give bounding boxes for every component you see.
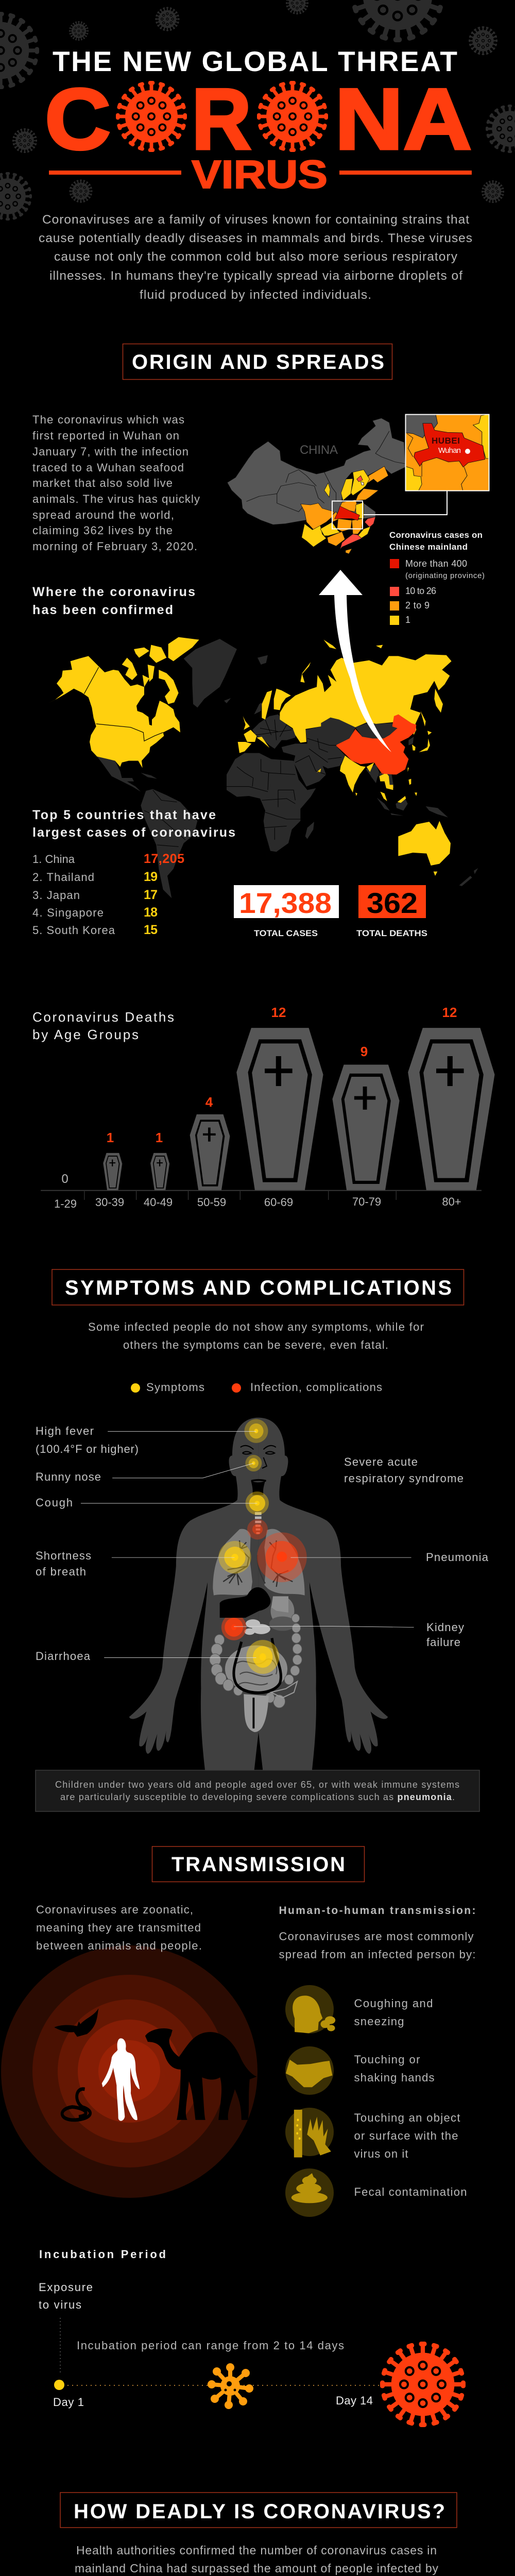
marker: pneumonia	[257, 1532, 307, 1582]
title word: CORONA	[45, 71, 472, 167]
leader lines	[81, 1431, 414, 1657]
icon: cough	[293, 1995, 335, 2033]
symptoms legend: Infection, complications	[250, 1381, 382, 1394]
china map legend: 10 to 26	[405, 586, 436, 596]
transmission route labels: virus on it	[354, 2147, 408, 2160]
stat: total deaths: 362	[367, 887, 418, 919]
coffin chart: 30-39	[95, 1196, 124, 1209]
body labels: Kidney	[426, 1621, 464, 1634]
stat: total deaths	[356, 885, 427, 938]
title word: CORONA: R	[192, 71, 251, 167]
body labels: of breath	[36, 1565, 86, 1578]
origin text: morning of February 3, 2020.	[32, 540, 197, 553]
coffin chart: 80+	[442, 1195, 461, 1208]
coffin chart: 50-59	[197, 1196, 226, 1209]
hubei inset map: Wuhan	[438, 446, 461, 455]
transmission route labels: sneezing	[354, 2015, 404, 2028]
coffin chart: 40-49	[144, 1196, 173, 1209]
transmission route labels	[354, 1997, 467, 2198]
transmission intro: meaning they are transmitted	[36, 1921, 201, 1934]
heading: deaths by age: by Age Groups	[32, 1027, 139, 1042]
transmission route labels: shaking hands	[354, 2071, 435, 2084]
incubation period timeline: to virus	[39, 2298, 81, 2311]
symptoms legend: Symptoms	[146, 1381, 204, 1394]
stat: total deaths: TOTAL DEATHS	[356, 928, 427, 938]
heading: transmission: TRANSMISSION	[171, 1853, 345, 1876]
list: top 5 countries: 3. Japan	[32, 889, 80, 902]
list: top 5 countries: 18	[144, 905, 158, 920]
stat: total cases	[234, 885, 339, 938]
coffin chart: 9	[360, 1044, 368, 1059]
transmission intro	[36, 1903, 202, 1952]
origin text: spread around the world,	[32, 509, 174, 521]
symptoms intro: Some infected people do not show any symptoms, while for	[88, 1320, 424, 1333]
coffin chart: 12	[271, 1005, 286, 1020]
coffin chart: 1	[156, 1130, 163, 1145]
hubei inset map	[405, 414, 490, 492]
heading: top 5 countries	[32, 808, 235, 840]
zoonotic rings	[1, 1945, 258, 2198]
background virus pattern	[0, 0, 515, 221]
lower markers	[221, 1419, 279, 1674]
list: top 5 countries: 15	[144, 923, 158, 937]
body labels: Cough	[36, 1496, 73, 1509]
deadly intro	[75, 2544, 439, 2576]
icon: human	[102, 2038, 140, 2121]
human-to-human text: Human-to-human transmission:	[279, 1905, 476, 1917]
abdominal organs	[210, 1597, 302, 1732]
intro text: illnesses. In humans they're typically spread via airborne droplets of	[49, 269, 462, 283]
title word: CORONA: C	[45, 71, 111, 167]
heading: how deadly	[60, 2493, 457, 2528]
icon: hand and surface	[294, 2110, 331, 2157]
stat: total cases: 17,388	[239, 887, 332, 919]
human-to-human text: spread from an infected person by:	[279, 1948, 476, 1961]
stat: total cases: TOTAL CASES	[254, 928, 318, 938]
heading: how deadly: HOW DEADLY IS CORONAVIRUS?	[74, 2500, 445, 2523]
origin text: January 7, with the infection	[32, 445, 188, 458]
callout: susceptibility note: are particularly susceptible to developing severe complications such as pneumonia.	[60, 1792, 455, 1802]
day 1 marker	[54, 2380, 64, 2390]
icon: virus as letter O	[116, 81, 328, 152]
heading: where confirmed	[32, 585, 195, 617]
list: top 5 countries: 4. Singapore	[32, 906, 104, 919]
incubation period timeline: Incubation period can range from 2 to 14 days	[77, 2339, 344, 2352]
origin text: animals. The virus has quickly	[32, 493, 200, 505]
china map legend: 2 to 9	[405, 600, 430, 611]
body labels: Diarrhoea	[36, 1650, 91, 1663]
body diagram	[81, 1418, 414, 1770]
intro text: fluid produced by infected individuals.	[140, 288, 371, 302]
body labels: respiratory syndrome	[344, 1472, 464, 1485]
markers: cough and trachea	[246, 1492, 269, 1539]
transmission route labels: or surface with the	[354, 2129, 458, 2142]
transmission route labels: Coughing and	[354, 1997, 433, 2010]
body labels: Shortness	[36, 1549, 91, 1562]
coffin chart: 12	[442, 1005, 457, 1020]
icon: feces	[291, 2173, 328, 2203]
china map label: CHINA	[300, 443, 338, 457]
hubei inset connector	[332, 491, 447, 529]
world map: americas and greenland	[48, 637, 237, 898]
china map legend: Coronavirus cases on	[389, 530, 483, 540]
coffin chart: 4	[205, 1094, 213, 1110]
china map legend: (originating province)	[405, 571, 485, 580]
arrow: spread from china	[319, 570, 391, 752]
body labels	[36, 1425, 489, 1663]
deadly intro: mainland China had surpassed the amount of people infected by	[75, 2562, 439, 2575]
body labels: (100.4°F or higher)	[36, 1443, 139, 1455]
transmission route labels: Touching or	[354, 2053, 420, 2066]
deadly intro: Health authorities confirmed the number of coronavirus cases in	[76, 2544, 437, 2557]
heading: top 5 countries: Top 5 countries that have	[32, 808, 216, 822]
intro text: cause potentially deadly diseases in mammals and birds. These viruses	[39, 231, 472, 245]
human-to-human text	[279, 1905, 476, 1961]
callout: susceptibility note	[36, 1770, 479, 1811]
icon: bat	[54, 2008, 98, 2037]
coffin chart: 1-29	[54, 1197, 77, 1210]
origin text: traced to a Wuhan seafood	[32, 461, 184, 474]
list: top 5 countries: 17	[144, 888, 158, 902]
symptoms legend	[131, 1381, 382, 1394]
heading: where confirmed: Where the coronavirus	[32, 585, 195, 599]
incubation period timeline: Day 14	[336, 2394, 373, 2407]
body labels: High fever	[36, 1425, 94, 1437]
incubation period timeline: Incubation Period	[39, 2248, 166, 2261]
origin text: market that also sold live	[32, 477, 173, 489]
icon: red virus	[380, 2342, 466, 2427]
thorax: lungs trachea and markers	[213, 1481, 307, 1618]
transmission route icons	[285, 1985, 335, 2217]
china map legend: 1	[405, 615, 410, 625]
marker: shortness of breath	[218, 1541, 251, 1573]
heading: origin and spreads: ORIGIN AND SPREADS	[132, 351, 384, 374]
origin text: claiming 362 lives by the	[32, 524, 173, 537]
origin text: The coronavirus which was	[32, 413, 184, 426]
incubation period timeline	[39, 2248, 466, 2427]
hubei inset map: HUBEI	[432, 436, 460, 446]
icon: snake	[62, 2089, 90, 2120]
title	[45, 45, 472, 197]
transmission route labels: Touching an object	[354, 2111, 460, 2124]
symptoms intro: others the symptoms can be severe, even fatal.	[123, 1338, 388, 1351]
heading: deaths by age	[32, 1009, 174, 1042]
intro text	[39, 213, 472, 302]
heading: symptoms and complications: SYMPTOMS AND COMPLICATIONS	[65, 1277, 452, 1299]
title word: VIRUS: VIRUS	[192, 152, 328, 197]
coffin chart	[41, 1005, 495, 1210]
world map: eurasia africa oceania	[227, 640, 478, 886]
list: top 5 countries	[32, 852, 184, 937]
heading: symptoms and complications	[52, 1269, 464, 1305]
title: THE NEW GLOBAL THREAT	[53, 45, 457, 77]
icon: handshake	[286, 2060, 332, 2087]
transmission intro: between animals and people.	[36, 1939, 202, 1952]
body labels: failure	[426, 1636, 460, 1649]
title word: CORONA: NA	[335, 71, 472, 167]
callout: susceptibility note: Children under two years old and people aged over 65, or with weak immune systems	[55, 1780, 459, 1790]
heading: transmission	[152, 1846, 365, 1882]
coffin chart: 1	[107, 1130, 114, 1145]
intro text: cause not only the common cold but also more serious respiratory	[54, 250, 458, 264]
origin text	[32, 413, 200, 553]
icon: orange virus	[208, 2363, 253, 2409]
body labels: Pneumonia	[426, 1551, 489, 1564]
china map legend	[389, 530, 485, 625]
heading: deaths by age: Coronavirus Deaths	[32, 1009, 174, 1025]
body labels: Runny nose	[36, 1470, 101, 1483]
coffin chart: 70-79	[352, 1195, 381, 1208]
face	[241, 1446, 276, 1481]
list: top 5 countries: 1. China	[32, 853, 75, 866]
incubation period timeline: Exposure	[39, 2281, 93, 2294]
list: top 5 countries: 17,205	[144, 852, 184, 866]
intro text: Coronaviruses are a family of viruses known for containing strains that	[42, 213, 469, 227]
title word: VIRUS	[49, 152, 472, 197]
coffin chart: 60-69	[264, 1196, 293, 1209]
list: top 5 countries: 2. Thailand	[32, 871, 94, 884]
list: top 5 countries: 5. South Korea	[32, 924, 115, 937]
china map	[227, 418, 405, 554]
china map legend: More than 400	[405, 558, 467, 569]
origin text: first reported in Wuhan on	[32, 429, 179, 442]
coffin chart: 0	[61, 1172, 68, 1186]
china map legend: Chinese mainland	[389, 542, 468, 552]
symptoms intro	[88, 1320, 424, 1351]
icon: camel	[145, 2028, 257, 2120]
heading: where confirmed: has been confirmed	[32, 603, 173, 617]
transmission route labels: Fecal contamination	[354, 2185, 467, 2198]
heading: top 5 countries: largest cases of coronavirus	[32, 825, 235, 840]
heading: origin and spreads	[123, 344, 392, 379]
human-to-human text: Coronaviruses are most commonly	[279, 1930, 474, 1943]
incubation period timeline: Day 1	[53, 2396, 84, 2409]
body labels: Severe acute	[344, 1455, 418, 1468]
transmission intro: Coronaviruses are zoonatic,	[36, 1903, 193, 1916]
list: top 5 countries: 19	[144, 870, 158, 884]
